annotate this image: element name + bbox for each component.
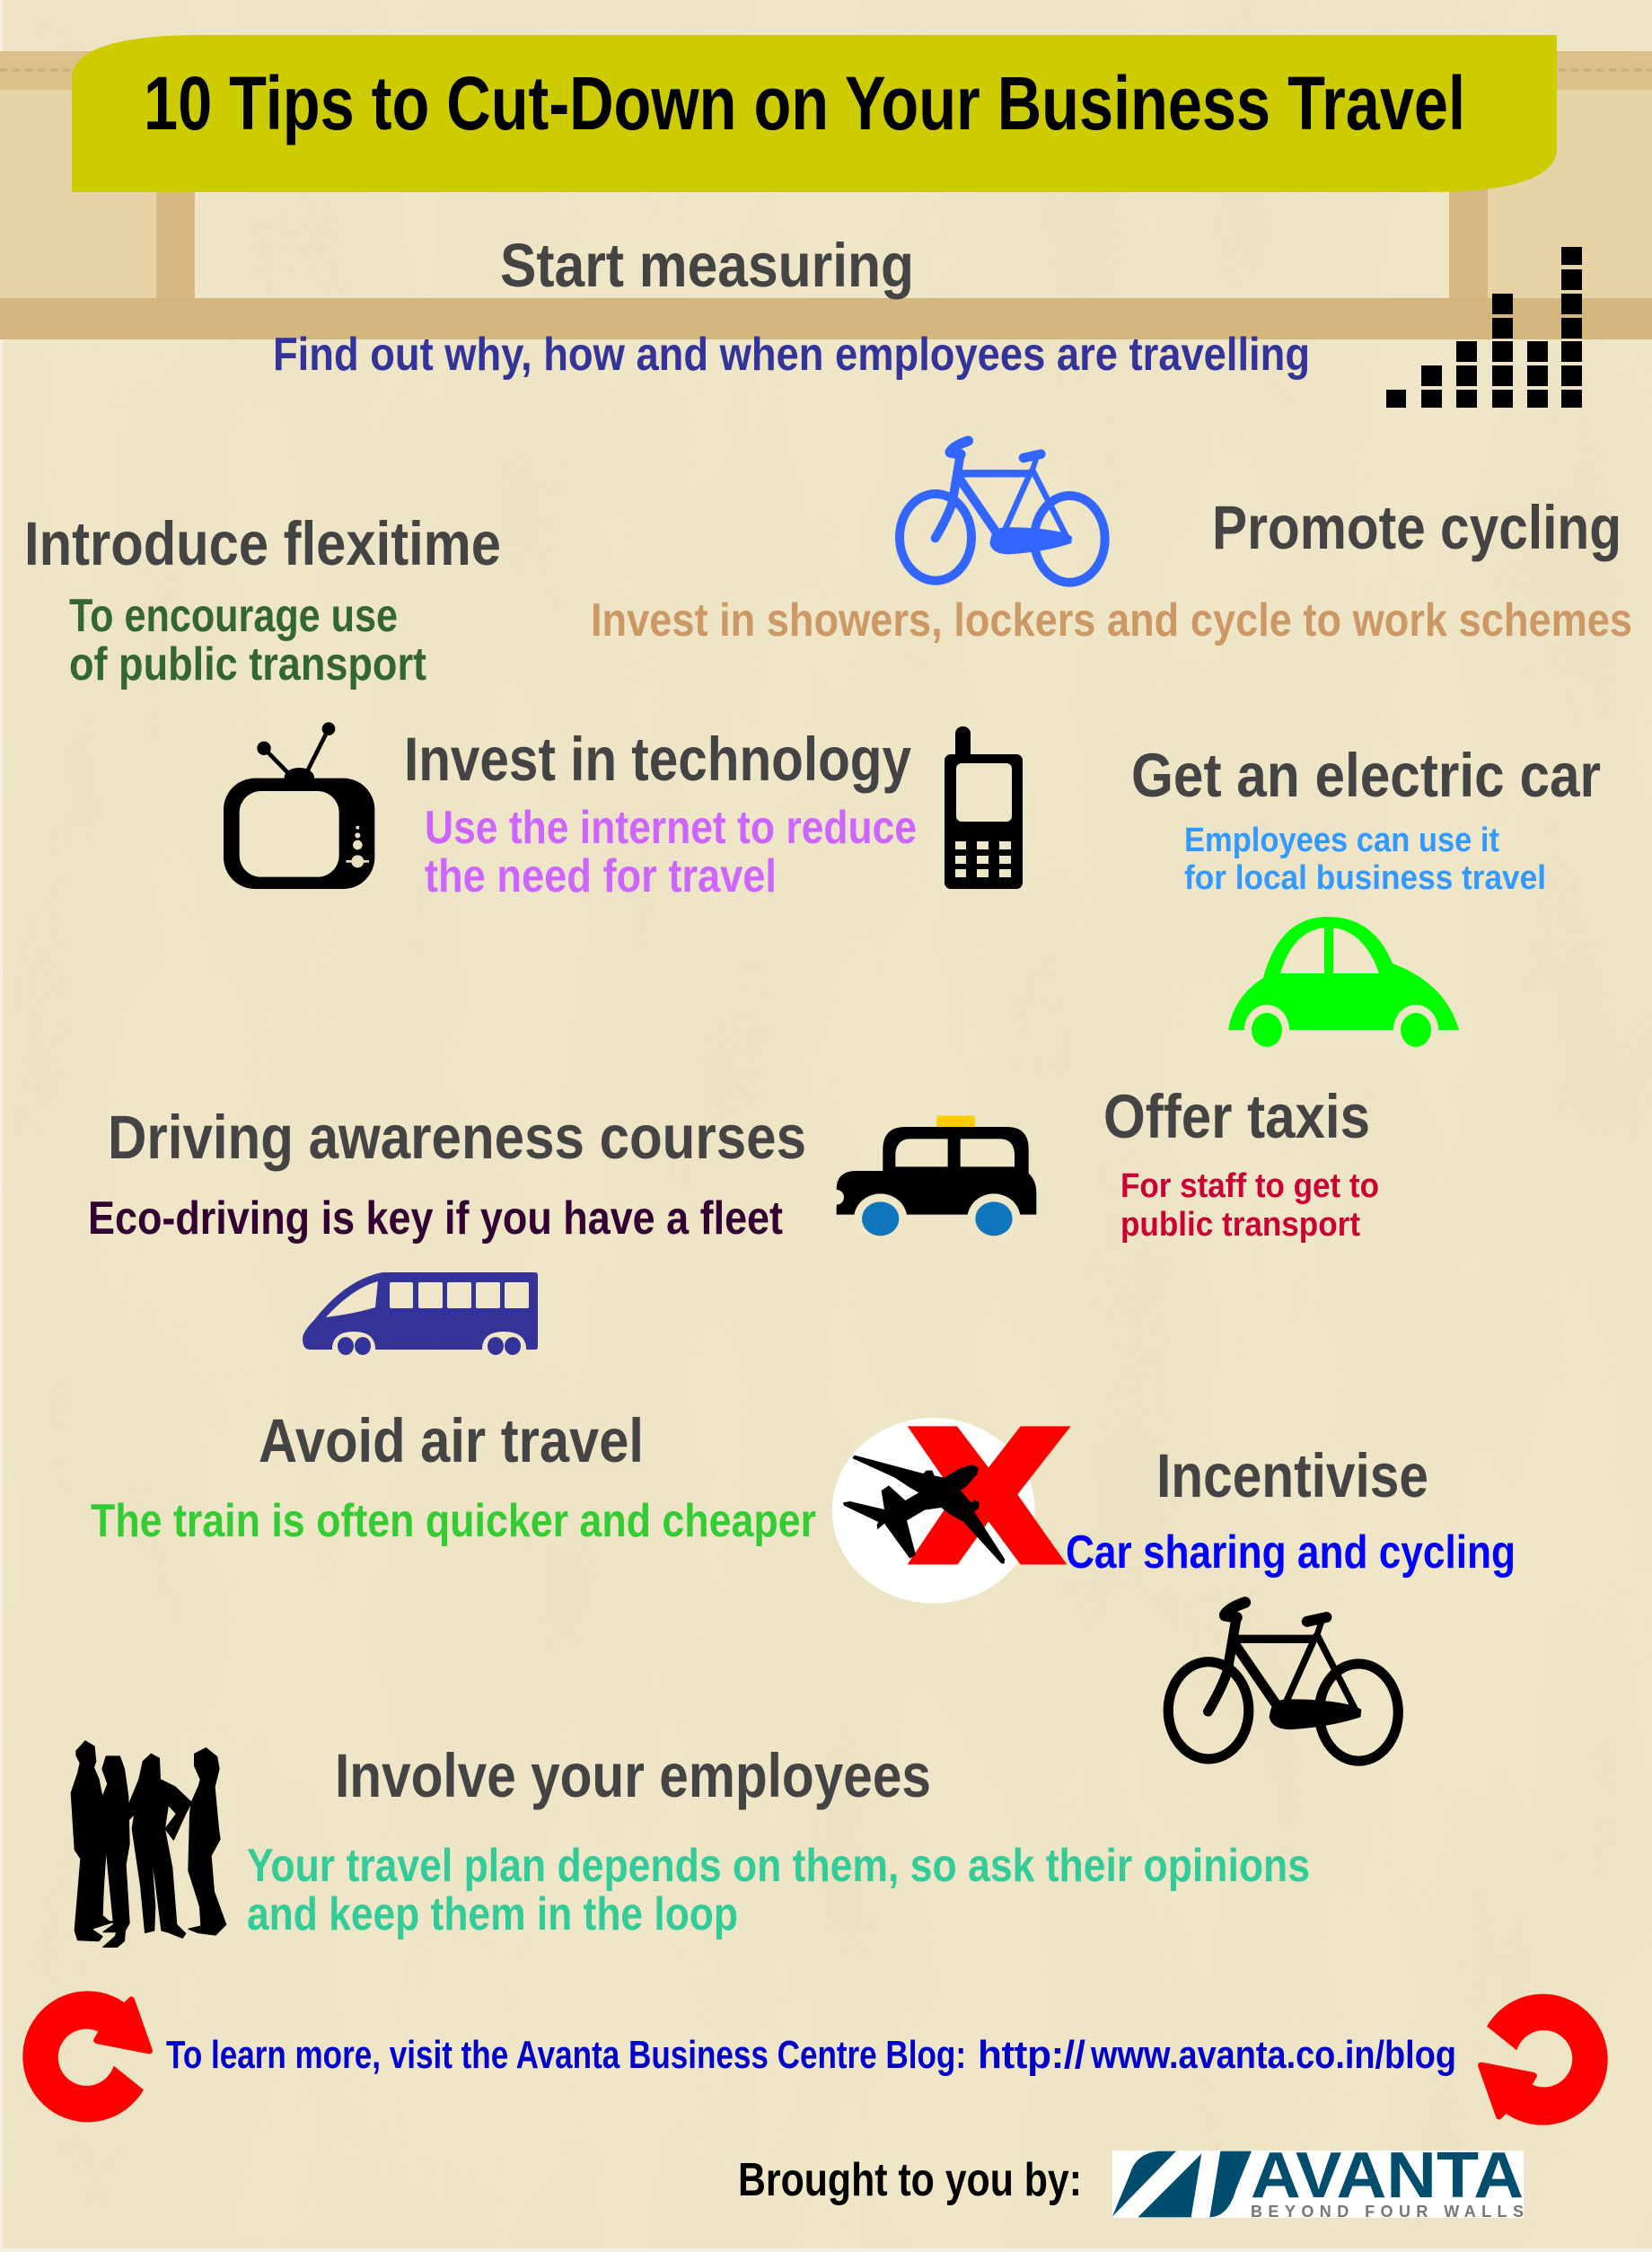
description: The train is often quicker and cheaper — [91, 1495, 816, 1547]
title banner — [72, 35, 1557, 192]
description — [1184, 822, 1546, 897]
description: the need for travel — [425, 850, 777, 902]
wooden frame behind title — [0, 51, 1652, 339]
tip: involve your employees — [247, 1741, 1310, 1940]
icon: crossed-out airplane — [832, 1418, 1071, 1604]
tip: avoid air travel — [91, 1406, 816, 1547]
description: Employees can use it — [1184, 822, 1499, 859]
tip: introduce flexitime — [24, 509, 501, 691]
description: For staff to get to — [1120, 1167, 1379, 1205]
description: for local business travel — [1184, 859, 1546, 897]
tip: invest in technology — [404, 725, 917, 902]
description: Car sharing and cycling — [1066, 1526, 1516, 1579]
description: Use the internet to reduce — [425, 802, 917, 854]
blog link text: http:// — [978, 2033, 1085, 2077]
icon: left red arrow — [22, 1991, 153, 2122]
credit text: Brought to you by: — [738, 2154, 1082, 2206]
icon: bus — [303, 1272, 538, 1355]
icon: blue bicycle — [900, 441, 1105, 583]
description: To encourage use — [69, 590, 398, 642]
icon: bar chart — [1386, 247, 1582, 408]
description — [1120, 1167, 1379, 1244]
tip: get an electric car — [1131, 741, 1601, 897]
icon: taxi — [829, 1115, 1036, 1244]
icon: green car — [1228, 917, 1459, 1055]
blog link text: www.avanta.co.in/blog — [1090, 2033, 1456, 2077]
heading: Invest in technology — [404, 725, 911, 794]
logo: Avanta: BEYOND FOUR WALLS — [1251, 2203, 1524, 2221]
description: of public transport — [69, 638, 426, 691]
tip: start measuring — [273, 231, 1310, 381]
description: Find out why, how and when employees are travelling — [273, 329, 1310, 381]
icon: mobile phone — [945, 726, 1023, 889]
heading: Start measuring — [500, 231, 914, 300]
description: and keep them in the loop — [247, 1888, 738, 1940]
description: public transport — [1120, 1206, 1360, 1244]
description — [425, 802, 917, 902]
description — [247, 1840, 1310, 1940]
icon: right red arrow — [1478, 1994, 1608, 2125]
heading: Incentivise — [1156, 1441, 1428, 1510]
heading: Involve your employees — [335, 1741, 931, 1810]
tip: promote cycling — [591, 493, 1632, 647]
icon: television — [224, 722, 374, 889]
tip: driving awareness courses — [88, 1103, 806, 1245]
heading: Introduce flexitime — [24, 509, 501, 578]
logo: Avanta: AVANTA — [1251, 2140, 1524, 2212]
heading: Avoid air travel — [259, 1406, 644, 1475]
description — [69, 590, 426, 691]
logo: Avanta — [1112, 2140, 1524, 2221]
heading: Driving awareness courses — [108, 1103, 806, 1172]
heading: Offer taxis — [1103, 1082, 1370, 1151]
tip: offer taxis — [1103, 1082, 1379, 1244]
description: Eco-driving is key if you have a fleet — [88, 1192, 783, 1245]
blog link text: To learn more, visit the Avanta Business Centre Blog: — [166, 2033, 966, 2077]
description: Your travel plan depends on them, so ask their opinions — [247, 1840, 1310, 1892]
tip: incentivise — [1066, 1441, 1516, 1579]
icon: group of employees silhouette — [71, 1741, 226, 1947]
icon: black bicycle — [1168, 1603, 1398, 1761]
